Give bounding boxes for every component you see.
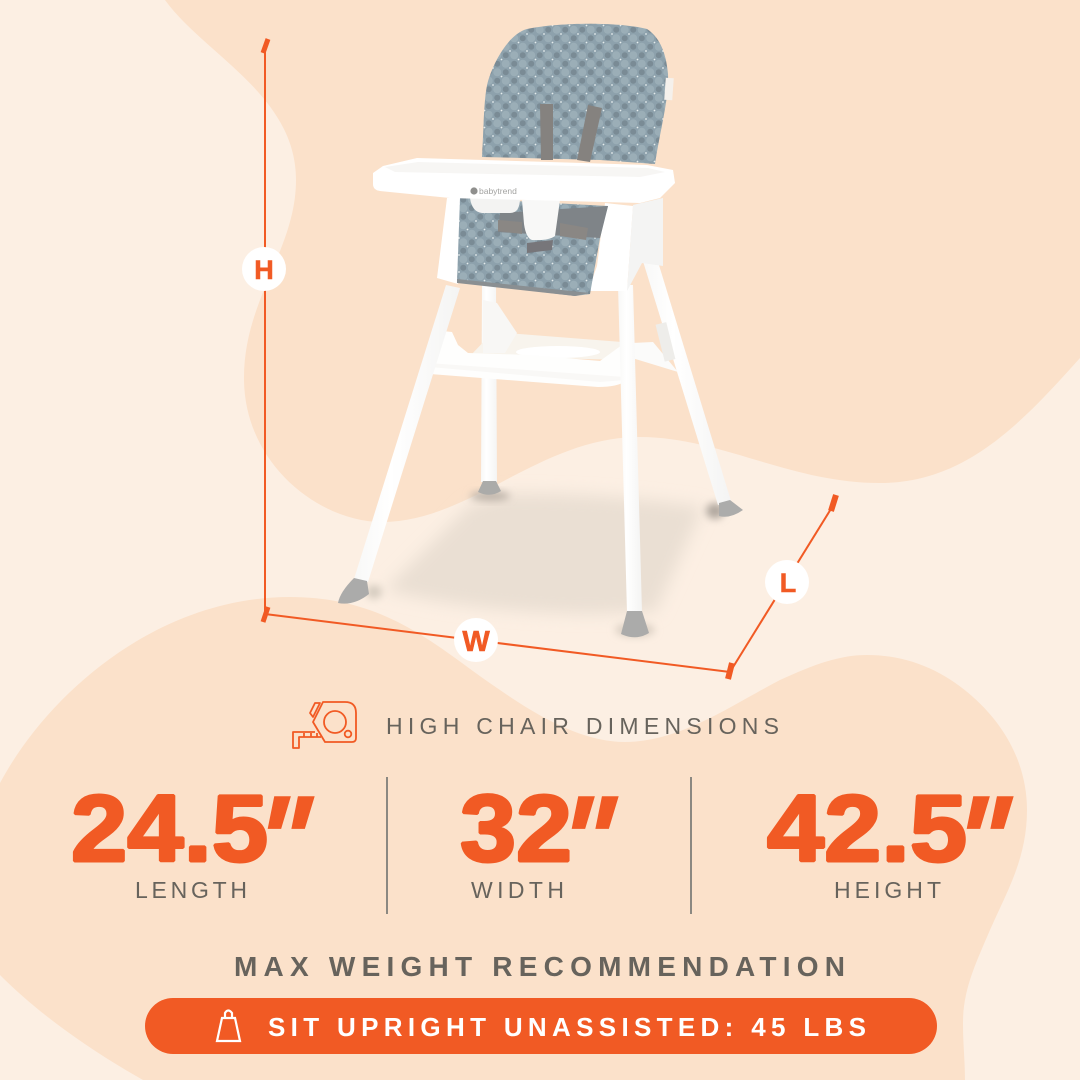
floor shadow [385, 494, 703, 614]
divider [386, 777, 388, 914]
brand label: babytrend [479, 186, 517, 196]
icon: weight [217, 1010, 240, 1041]
stat: width: " [543, 770, 632, 910]
back left leg [481, 285, 497, 482]
stat: height: HEIGHT [834, 877, 941, 903]
stat: length: LENGTH [135, 877, 247, 903]
heading: max weight recommendation: MAX WEIGHT RECOMMENDATION [234, 951, 845, 982]
back right leg [642, 252, 731, 505]
divider [690, 777, 692, 914]
stat: height: 42.5 [767, 776, 967, 882]
stat: width [460, 770, 632, 910]
tray [373, 158, 675, 203]
shoulder straps [540, 104, 553, 160]
front right leg [618, 285, 642, 612]
width dimension line [265, 614, 730, 672]
high chair photo illustration [338, 24, 743, 637]
stat: height [767, 770, 1027, 910]
height dimension line: H [254, 255, 274, 285]
width dimension line: W [462, 626, 490, 658]
back pad with pattern [482, 24, 668, 164]
weight text: SIT UPRIGHT UNASSISTED: 45 LBS [268, 1012, 866, 1042]
front left leg [354, 285, 460, 582]
stat: length [71, 770, 328, 910]
background blob: bottom [0, 597, 1027, 1080]
stat: length: 24.5 [71, 776, 268, 882]
height dimension line [242, 39, 286, 622]
length dimension line: L [780, 568, 796, 598]
icon: tape measure [293, 702, 356, 748]
weight pill [145, 998, 937, 1054]
seat cushion pieces [457, 198, 608, 296]
stat: length: " [239, 770, 328, 910]
seat body left [437, 198, 462, 284]
seat body right [588, 203, 633, 291]
footrest: rear mesh and struts [470, 332, 626, 360]
length dimension line [728, 495, 836, 679]
tray pommel [470, 198, 520, 213]
stat: width: 32 [460, 776, 572, 882]
crotch straps and buckle [498, 220, 522, 234]
heading: high chair dimensions: HIGH CHAIR DIMENSIONS [386, 713, 779, 739]
stat: height: " [938, 770, 1027, 910]
footrest: front band [425, 330, 629, 387]
background blob: top [165, 0, 1080, 522]
stat: width: WIDTH [471, 877, 564, 903]
